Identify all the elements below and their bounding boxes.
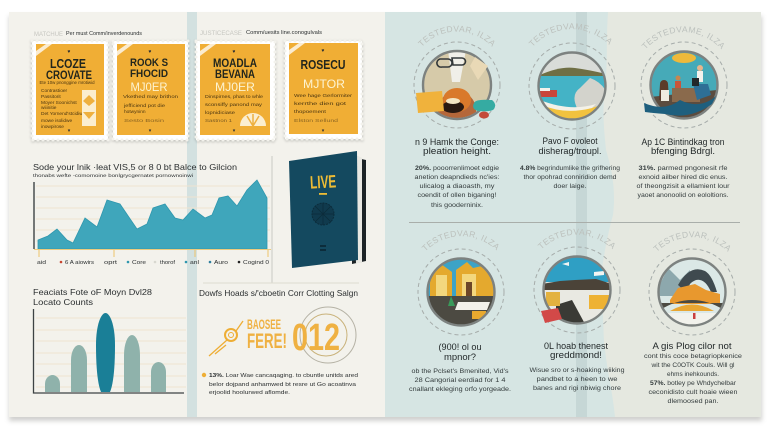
gauge text: BAOSEE [247,316,281,332]
title: 0L hoab thenest [544,341,608,351]
title: n 9 Hamk the Conge: [415,137,499,147]
icon: cathedral [425,258,497,326]
title: (900! ol ou [438,342,482,352]
icon: passport [289,151,366,268]
icon: boat people [644,50,720,122]
stamp 3: ▾ [233,128,236,134]
body [409,368,511,393]
heading: stamps left [34,31,143,38]
legend: aid [37,260,46,266]
area series [38,180,267,249]
chart heading [33,162,237,178]
body [530,367,625,392]
stamp 1: LCOZE [50,56,86,71]
title: A gis Plog cilor not [652,341,732,351]
stamp 2: hotwyninn [124,109,146,115]
stamp 3: Dinspirnes, phas to whle [205,94,263,100]
gauge note: 13%. Loar Wae cancaqaging. to cbuntle unitds ared [209,373,358,379]
body [414,165,500,209]
column 2 top [520,23,620,190]
body: Wisue sro or s-hoaking wiiking [530,367,625,374]
body: 28 Cangorial eerdiad for 1 4 [414,377,506,384]
stamp 4: kerrthe dien got [294,101,347,107]
stamp 1: Passitorit [41,94,61,100]
bar chart heading: Feaciats Fote oF Moyn Dvl28 [33,287,152,297]
heading: stamps right: Comm/uesits line.conogulvals [246,30,323,36]
panel: right page [385,12,761,417]
stamp 3 [196,41,275,140]
body: coendit of ollen biganing! [418,192,497,199]
stamp 1: Contrastioer [41,88,68,94]
gauge text: 012 [292,317,340,359]
stamp 1: Det Yornend'stcidiw [41,111,83,117]
stamp 1: mowe isolidwe [41,118,73,124]
stamp 1 [32,41,108,140]
stamp 2: ♥ [149,49,152,55]
stamp 2: jefficiend pot die [123,103,165,109]
body: ehms inehkounds. [667,371,719,378]
bar chart heading: Locato Counts [33,297,93,307]
column 3 bottom [644,231,742,405]
heading: stamps left: Per must Comm/inverdenounds [66,31,143,37]
body: of theongzisit a ellamient lour [636,183,730,190]
stamp 4: thopoement [294,109,327,115]
panel: left page [9,12,385,417]
chart heading: thonabs wefte -comomoine bonlgrycgernatet pornownoinwi [33,173,193,178]
legend: oprt [104,260,118,266]
stamp 4: Elston Sellund [294,118,338,124]
stamp 1: ♥ [68,49,71,55]
stamp 1: Ete 10w pnonggine mrotiwid [40,80,95,86]
arc label: TESTEDVAME, ILZA [642,26,724,50]
body: anetion deapndieds nc'ies: [414,174,500,181]
stamp 4: ♥ [322,48,325,54]
body: ob the Pclset's Bmenited, Vid's [412,368,509,375]
axes [34,309,184,393]
legend: 6 A aiowirs [65,260,94,266]
column 2 bottom [530,228,625,392]
gauge text [247,316,340,359]
body: thor opohrad conniridion demd [524,174,617,181]
body: 4.8% begrindumlike the grifhering [520,165,620,172]
column 3 top: bfenging Bdrgl. [651,146,715,156]
stamp 3: lopnidiciase [205,110,235,116]
stamp 2: ▾ [149,128,152,134]
stamp 3: Sastnon 1 [205,118,232,124]
title: Ap 1C Bintindkag tron [642,137,724,147]
stamp 1: Moyer Soonichst [41,100,77,106]
icon: city street [541,256,613,326]
body: exnoid ailber hired dic enus. [638,174,728,181]
body [644,353,742,405]
stamp 2: ROOK S [130,57,168,69]
gauge note: erjoolid hoolurwed aflomde. [209,390,290,396]
arc label: TESTEDVAR, ILZA [653,231,730,252]
arc label: TESTEDVAR, ILZA [418,26,494,46]
body: cont this coce betagriopkenice [644,353,742,360]
legend: anl [190,260,199,266]
heading: stamps right: JUSTICECASE [200,30,243,37]
stamp 1: inowpirose [41,124,64,130]
column 1 bottom: mpnor? [444,352,476,362]
stamp 4: Wee hage Gerlormiter [294,93,352,99]
stamp 3: MOADLA [213,58,257,70]
legend: Cogind 0 [243,260,269,266]
icon: bridge landmark [657,258,729,326]
body: wit the C0OTK Couls. Will gl [650,362,735,369]
gauge note [202,373,358,396]
body: 31%. parmed pngonesit rfe [638,165,728,172]
body: pandbet to a heen to we [536,376,618,383]
stamp 3: MJ0ER [215,80,255,94]
stamp 1: ▾ [68,128,71,134]
stamp 3: BEVANA [215,69,255,81]
stamp 3: sconsiffy panond may [205,102,263,108]
column 3 top [636,26,730,199]
body: banes and rigi nbiwig chore [533,385,621,392]
body: ceconidisto cult hoaie wieen [648,389,738,396]
gauge heading: Dowfs Hoads s/'cboetin Corr Clotting Salgn [199,289,358,298]
axes [33,182,35,249]
column 2 top: disherag/troupl. [538,146,602,156]
legend: thorof [160,260,175,266]
icon: coast scene [535,50,610,122]
panel: area chart [33,156,272,283]
stamp 2: FHOCID [130,68,168,80]
stamp 4: ▾ [322,128,325,134]
arc label: TESTEDVAME, ILZA [528,23,612,46]
body: cnallant ekleging orfo yorgeade. [409,386,511,393]
panel: gauge [199,283,359,396]
stamp 2: MJ0ER [130,80,168,94]
stamp 1: wiiinitie [41,105,57,111]
legend [37,260,269,266]
bar chart heading [33,287,152,307]
body: 20%. pooorrenlimoet edgie [415,165,499,172]
column 1 top [414,26,500,209]
column 1 top: pleation height. [423,146,491,156]
stamp 2 [113,41,188,140]
panel: bar chart [33,287,186,393]
stamp 2: Vkethed may brithon [123,94,178,100]
body: 57%. botley pe Whdychelbar [650,380,737,387]
arc label: TESTEDVAR, ILZA [538,228,614,250]
bars [45,313,166,392]
column 1 bottom [409,230,511,393]
column 2 bottom: greddmond! [550,350,602,360]
body: this gooderninix. [431,202,483,209]
gauge rings [209,307,356,363]
gauge note: belor dojpand anhamwed bt resre ut Go acoatinva [209,382,357,388]
divider [409,222,740,224]
body [636,165,730,199]
body: yaoet anonoolid on eololtions. [638,192,729,199]
arc label: TESTEDVAR, ILZA [422,230,498,250]
body: ulicalog a diaoasth, my [420,183,495,190]
stamp 4 [285,41,362,139]
legend: Auro [214,260,228,266]
icon: travel objects [416,50,495,122]
heading: stamps right [200,30,323,37]
stamp 3: ♥ [233,49,236,55]
stamp 4: MJTOR [303,77,345,91]
legend: Core [132,260,146,266]
body: dlemoosed pan. [668,398,719,405]
gauge text: FERE! [247,330,287,353]
chart heading: Sode your lnik ·leat VIS,5 or 8 0 bt Balce to Gilcion [33,162,237,172]
stamp 2: Sesto Bosin [124,118,165,124]
body [520,165,620,190]
icon: passport: LIVE [310,171,337,193]
body: doer laige. [554,183,587,190]
stamp 4: ROSECU [300,57,346,72]
heading: stamps left: MATCHUE [34,31,64,38]
stamp 1: CROVATE [46,68,92,82]
title: Pavo F ovoleot [542,136,598,146]
